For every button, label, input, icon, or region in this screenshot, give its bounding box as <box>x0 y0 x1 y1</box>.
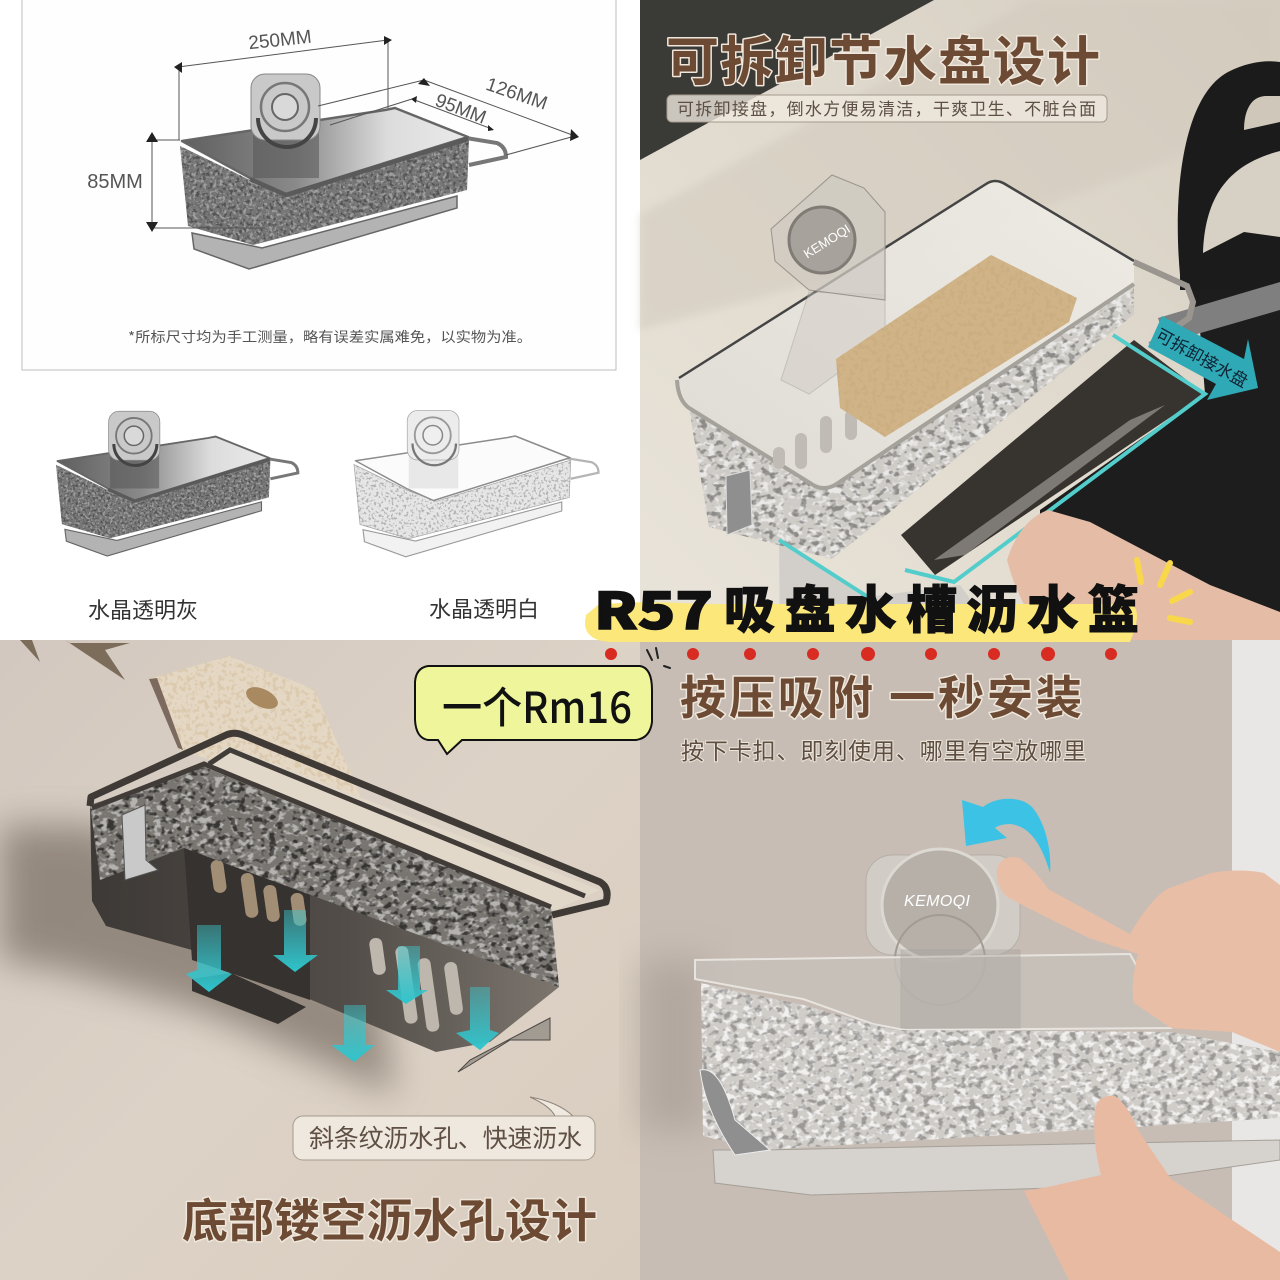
sponge <box>830 250 1080 440</box>
dark sink area <box>1040 270 1280 640</box>
suction stand <box>253 128 319 178</box>
sun rays <box>1137 560 1190 622</box>
grey sink strip <box>1158 282 1280 343</box>
panel: press to install <box>640 640 1280 1280</box>
mount bracket <box>458 1018 550 1072</box>
sink counter shade <box>640 0 1280 330</box>
handle <box>1134 262 1193 345</box>
textured side band <box>90 767 559 987</box>
label: white colour: 水晶透明白 <box>429 592 539 624</box>
rim inner edge <box>92 750 585 907</box>
label: 250MM: 250MM <box>247 27 313 54</box>
suction cup: KEMOQI <box>904 893 971 910</box>
drip tray <box>192 196 457 269</box>
lower hand <box>1024 1096 1280 1280</box>
textured body <box>701 983 1280 1150</box>
stand <box>409 451 458 488</box>
sponge <box>149 656 361 798</box>
subheading pill: 可拆卸接盘，倒水方便易清洁，干爽卫生、不脏台面 <box>677 95 1096 120</box>
chrome hook <box>122 805 158 880</box>
banner title: 吸盘水槽沥水篮 <box>724 569 1139 643</box>
stand <box>781 292 885 394</box>
faucet <box>1178 61 1280 290</box>
stand <box>901 950 1020 1028</box>
dimension arrowheads <box>146 36 579 232</box>
background <box>0 640 640 1280</box>
rim outer edge and handle <box>90 733 607 915</box>
light slots <box>369 937 464 1032</box>
red dots <box>605 647 1117 661</box>
heading: 可拆卸节水盘设计 <box>666 20 1100 96</box>
price bubble <box>415 666 652 754</box>
yellow highlight <box>585 602 1137 642</box>
back rim <box>679 181 1134 378</box>
dimension lines <box>152 40 575 228</box>
wall background <box>640 640 1280 1280</box>
product: small grey basket <box>49 411 298 556</box>
tray <box>713 1140 1280 1195</box>
opening <box>695 954 1171 1030</box>
bright right strip <box>1232 640 1280 1280</box>
front rim <box>677 284 1134 488</box>
chrome hook <box>726 470 752 535</box>
cast shadow <box>0 825 395 1095</box>
basket interior <box>677 180 1134 490</box>
dimensions frame <box>22 0 616 370</box>
banner title: R57 <box>594 572 713 644</box>
cup <box>407 410 459 465</box>
suction cup: KEMOQI <box>801 221 853 261</box>
handle <box>564 458 598 479</box>
basket shadow <box>640 960 710 1130</box>
heading: 按压吸附 一秒安装 <box>680 662 1082 728</box>
panel: drainage holes <box>0 640 640 1280</box>
dark top-left band <box>640 0 934 160</box>
faucet window lower <box>1203 151 1280 253</box>
hand <box>1007 510 1280 640</box>
textured body <box>689 282 1134 559</box>
inner dark well <box>184 848 310 1000</box>
opening <box>356 436 570 500</box>
product: dark basket underside <box>85 733 607 1072</box>
front rim band <box>250 139 468 195</box>
drain slots <box>773 410 857 469</box>
suction cup <box>771 175 885 300</box>
caption pill: 斜条纹沥水孔、快速沥水 <box>309 1119 582 1155</box>
top opening <box>182 108 468 194</box>
arrows: water flow <box>186 910 499 1062</box>
suction cup <box>251 74 320 147</box>
subheading: 按下卡扣、即刻使用、哪里有空放哪里 <box>681 732 1086 766</box>
panel: dimensions and colours <box>0 0 640 640</box>
footnote: *所标尺寸均为手工测量，略有误差实属难免，以实物为准。 <box>128 327 532 347</box>
price bubble: 一个Rm16 <box>442 674 632 736</box>
faucet window upper <box>1244 96 1280 130</box>
chrome hook <box>700 1070 770 1155</box>
wall background <box>640 0 1280 640</box>
central banner <box>415 560 1190 754</box>
suction cup <box>866 849 1020 1005</box>
tray below <box>779 540 1000 640</box>
product: clear basket <box>677 175 1193 640</box>
label: 85MM: 85MM <box>87 171 143 193</box>
label: 126MM: 126MM <box>483 74 550 115</box>
caption pill <box>293 1097 595 1160</box>
upper hand <box>997 857 1280 1052</box>
arrow: tray direction: 可拆卸接水盘 <box>1152 321 1253 392</box>
arrow: press direction <box>962 799 1050 873</box>
ring interior <box>205 745 600 910</box>
underside <box>90 767 559 1052</box>
sparkle <box>647 648 670 668</box>
panel: removable drip tray <box>640 0 1280 640</box>
heading: 底部镂空沥水孔设计 <box>182 1185 597 1251</box>
textured body <box>354 460 571 539</box>
dark slots <box>210 859 307 927</box>
mount block <box>192 973 306 1024</box>
product: clear basket <box>695 950 1280 1195</box>
textured body <box>180 140 469 245</box>
label: 95MM: 95MM <box>432 90 489 129</box>
plant leaves <box>20 640 130 680</box>
handle <box>460 137 506 165</box>
removable tray <box>779 335 1205 597</box>
product: small white basket <box>346 410 598 557</box>
label: grey colour: 水晶透明灰 <box>88 593 198 625</box>
tray <box>363 502 562 557</box>
product: grey basket with dimensions <box>170 74 506 269</box>
